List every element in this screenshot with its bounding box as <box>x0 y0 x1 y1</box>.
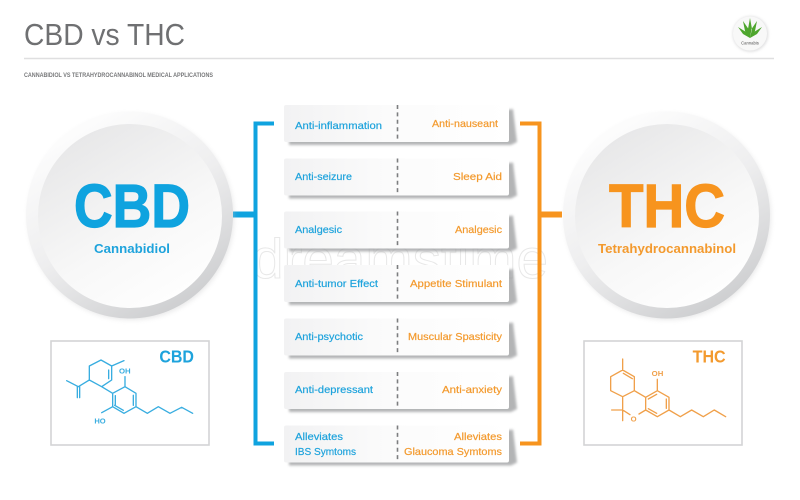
panel: row 6: Anti-depressant <box>295 384 373 396</box>
panel: row 3: Analgesic <box>455 224 502 236</box>
subtitle: CANNABIDIOL VS TETRAHYDROCANNABINOL MEDICAL APPLICATIONS <box>24 72 214 79</box>
panel: row 5 <box>284 318 517 358</box>
panel: row 3 <box>284 212 517 252</box>
panel: THC molecule: OH <box>652 369 664 378</box>
panel: CBD molecule: CBD <box>159 347 194 367</box>
panel: CBD circle: CBD <box>74 172 190 240</box>
title: CBD vs THC <box>24 18 185 52</box>
panel: row 1: Anti-nauseant <box>432 118 498 130</box>
icon: cannabis badge: Cannabis <box>741 40 759 46</box>
panel: THC circle <box>563 112 771 320</box>
watermark: dreamstime <box>252 227 548 290</box>
panel: row 3: Analgesic <box>295 224 342 236</box>
panel: row 7: Alleviates <box>454 431 502 443</box>
panel: THC molecule: THC <box>693 346 726 366</box>
panel: row 5: Anti-psychotic <box>295 331 363 343</box>
panel: THC circle: Tetrahydrocannabinol <box>598 241 736 256</box>
panel: row 6: Anti-anxiety <box>442 384 503 396</box>
panel: row 6 <box>284 372 517 412</box>
panel: row 7: IBS Symtoms <box>295 446 356 458</box>
panel: row 2: Anti-seizure <box>295 171 352 183</box>
panel: THC molecule <box>584 341 742 445</box>
panel: row 5: Muscular Spasticity <box>408 331 503 343</box>
panel: row 1 <box>284 105 517 145</box>
panel: row 7: Glaucoma Symtoms <box>404 446 502 458</box>
panel: row 7 <box>284 426 517 466</box>
panel: row 2: Sleep Aid <box>453 171 502 183</box>
panel: CBD circle: Cannabidiol <box>94 241 170 256</box>
panel: CBD molecule: OH <box>119 366 131 375</box>
panel: THC molecule: O <box>631 414 637 423</box>
panel: row 7: Alleviates <box>295 431 343 443</box>
panel: CBD molecule: HO <box>94 416 106 425</box>
icon: cannabis badge <box>732 16 768 52</box>
panel: row 4: Anti-tumor Effect <box>295 278 378 290</box>
panel: row 4 <box>284 265 517 305</box>
panel: row 1: Anti-inflammation <box>295 120 382 132</box>
orange bracket connector <box>520 124 562 444</box>
panel: row 2 <box>284 158 517 198</box>
panel: CBD circle <box>26 112 234 320</box>
panel: CBD molecule <box>51 341 209 445</box>
header rule <box>24 58 774 60</box>
panel: THC circle: THC <box>609 172 725 240</box>
panel: row 4: Appetite Stimulant <box>410 278 502 290</box>
blue bracket connector <box>233 124 274 444</box>
